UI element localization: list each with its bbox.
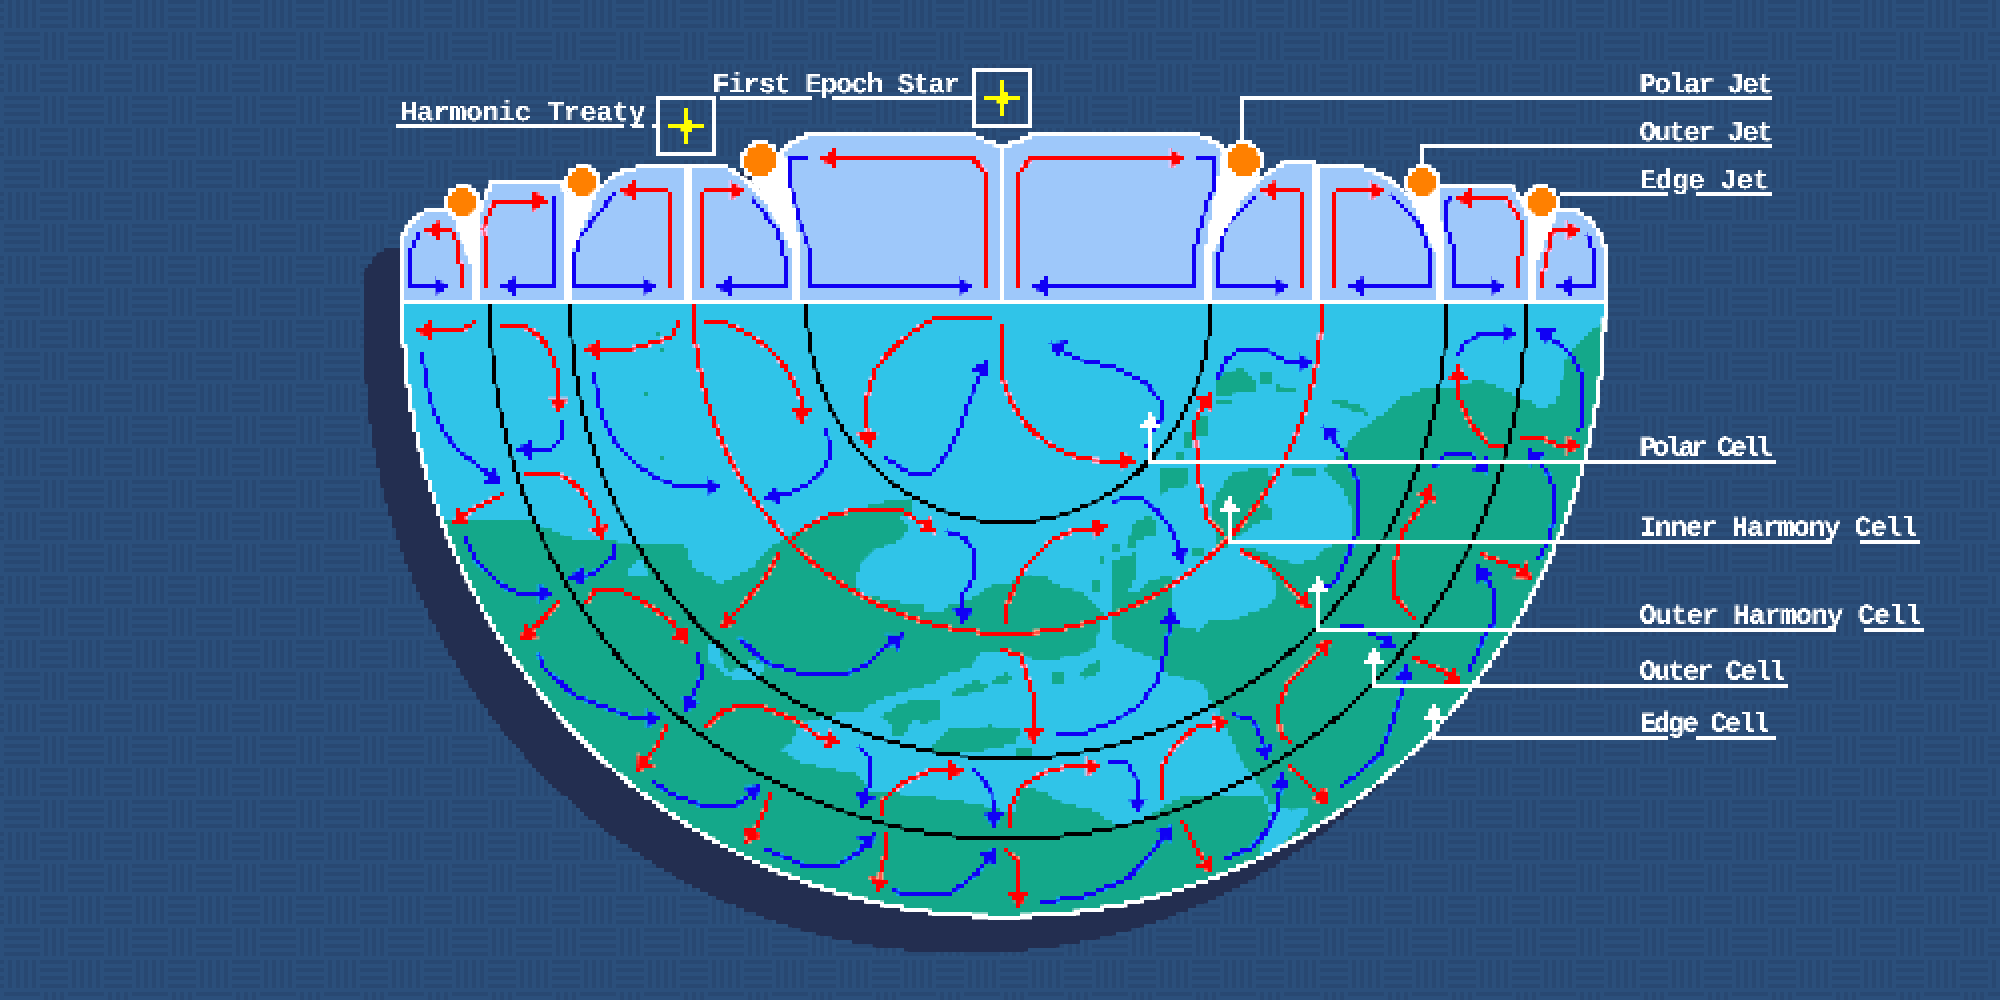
cell boundary: outer/outer harmony (570, 304, 1446, 758)
arrow (1340, 626, 1395, 647)
panel: jet cell 1 (400, 211, 472, 300)
arrow (524, 474, 601, 540)
arrow (1458, 365, 1504, 446)
arrow (1538, 328, 1581, 432)
callout: Edge Cell (1434, 704, 1776, 740)
arrow (538, 653, 660, 718)
arrow (764, 428, 830, 497)
arrow (652, 781, 760, 805)
panel: jet cell 8 (1319, 166, 1438, 300)
leader arrow (1318, 577, 1924, 630)
label: Outer Harmony Cell (1639, 601, 1921, 632)
callout: Outer Jet (1421, 118, 1773, 165)
arrow (892, 848, 995, 894)
arrow (1412, 657, 1460, 683)
arrow (594, 372, 720, 486)
arrow (704, 322, 801, 423)
arrow (746, 793, 770, 843)
label: Edge Cell (1639, 709, 1769, 740)
arrow: blue (1032, 158, 1213, 286)
arrow (1049, 342, 1162, 447)
cell boundary: harmony divide (red) (693, 304, 1321, 633)
arrow: blue (501, 197, 555, 286)
label: Inner Harmony Cell (1639, 513, 1917, 544)
arrow (882, 770, 963, 815)
arrow: blue (410, 233, 448, 286)
callout: Outer Cell (1374, 648, 1787, 688)
arrow (1162, 720, 1228, 800)
arrow: red (1334, 190, 1384, 288)
panel: jet cell 9 (1437, 185, 1530, 300)
arrow (1288, 765, 1328, 803)
arrow (1322, 425, 1358, 590)
callout: Polar Cell (1150, 413, 1776, 464)
leader arrow (1374, 648, 1787, 686)
panel: jet cell 5 (782, 135, 1001, 300)
label: Edge Jet (1639, 166, 1769, 197)
callout: Harmonic Treaty (397, 98, 715, 155)
arrow (1057, 608, 1170, 734)
arrow (1479, 553, 1531, 578)
arrows in map (416, 318, 1581, 907)
arrow: red (820, 158, 986, 288)
arrow (516, 421, 562, 449)
arrow (705, 706, 840, 742)
icon: star box (974, 70, 1030, 126)
callout: Polar Jet (1241, 70, 1773, 140)
cell boundary: edge/outer (490, 304, 1526, 839)
arrow (569, 544, 614, 577)
arrow (1434, 453, 1488, 473)
leader line (397, 124, 659, 128)
arrow (637, 725, 666, 771)
label: Harmonic Treaty (400, 98, 645, 129)
arrow (973, 769, 994, 827)
arrow (1217, 349, 1312, 379)
arrow (738, 634, 903, 673)
icon: jet marker 2 (564, 164, 600, 250)
diagram (362, 135, 1620, 953)
leader line (719, 96, 974, 100)
panel: jet cell 6 (1003, 135, 1224, 300)
arrow (1239, 550, 1310, 607)
arrow (416, 321, 475, 330)
arrow (520, 601, 559, 639)
arrow: blue (1218, 197, 1288, 286)
arrow: red (1018, 158, 1184, 288)
arrow (866, 318, 991, 447)
arrow: red (483, 200, 547, 288)
map: ocean and land (380, 290, 1620, 930)
arrow (1395, 485, 1431, 618)
arrow (878, 832, 886, 892)
label: Outer Jet (1639, 118, 1773, 149)
arrow: red (1261, 190, 1302, 288)
leader line (1421, 146, 1773, 165)
arrow: blue (1349, 193, 1431, 286)
arrow: red (620, 190, 670, 288)
arrow (1194, 393, 1223, 534)
arrow (1520, 437, 1580, 445)
arrow (945, 530, 973, 623)
panel: jet cell 4 (690, 164, 795, 300)
arrow (1457, 333, 1516, 355)
cell boundary: polar cell (806, 304, 1210, 522)
arrow: red (425, 230, 462, 288)
arrow (1002, 323, 1134, 460)
arrow (1006, 526, 1107, 623)
arrow (765, 833, 874, 866)
label: First Epoch Star (712, 70, 960, 101)
icon: star box (659, 99, 715, 155)
arrow (1004, 849, 1018, 907)
label: Polar Jet (1639, 70, 1773, 101)
arrow: blue (574, 193, 656, 286)
arrow (1113, 497, 1182, 563)
arrow (1000, 649, 1033, 743)
arrow (421, 352, 500, 483)
callout: Inner Harmony Cell (1229, 497, 1919, 544)
arrow (793, 510, 935, 540)
arrow: red (702, 190, 744, 288)
callout: First Epoch Star (712, 70, 1030, 126)
arrow (1340, 665, 1406, 786)
drop shadow (362, 171, 1567, 953)
label: Polar Cell (1639, 433, 1772, 464)
callout: Outer Harmony Cell (1318, 577, 1924, 632)
arrow (1224, 773, 1282, 858)
arrow (1278, 640, 1330, 743)
label: Outer Cell (1639, 657, 1785, 688)
map outline (402, 302, 1604, 916)
leader arrow (1150, 413, 1776, 462)
leader arrow (1229, 497, 1919, 542)
arrow: red (1542, 230, 1580, 288)
panel: jet cell 10 (1533, 211, 1605, 300)
arrow (586, 590, 686, 643)
arrow: blue (791, 158, 972, 286)
arrow (1040, 825, 1172, 902)
arrow (1108, 762, 1137, 812)
arrow (501, 326, 558, 412)
arrow: blue (716, 197, 784, 286)
arrow (1010, 766, 1100, 827)
panel: jet cell 3 (568, 166, 686, 300)
icon: jet marker 4 (1205, 140, 1263, 255)
arrow (452, 493, 504, 523)
icon: jet marker 6 (1523, 184, 1559, 265)
leader line (1558, 192, 1770, 196)
arrow: blue (1557, 233, 1594, 286)
icon: jet marker 5 (1404, 164, 1441, 255)
arrow (1182, 820, 1212, 872)
arrow (584, 321, 679, 349)
leader line (1241, 98, 1773, 140)
arrow: red (1456, 198, 1522, 288)
icon: jet marker 1 (444, 184, 480, 265)
arrow (885, 360, 985, 473)
arrow (685, 653, 702, 712)
arrow (465, 537, 552, 593)
arrow (721, 552, 779, 627)
leader arrow (1434, 704, 1776, 738)
arrow (1232, 714, 1266, 760)
panel: jet cell 2 (476, 183, 566, 300)
panel: jet cell 7 (1208, 163, 1315, 300)
icon: jet marker 3 (740, 140, 800, 255)
arrow: blue (1446, 197, 1504, 286)
arrow (1469, 565, 1493, 670)
arrow (1528, 450, 1554, 560)
arrow (857, 746, 870, 807)
